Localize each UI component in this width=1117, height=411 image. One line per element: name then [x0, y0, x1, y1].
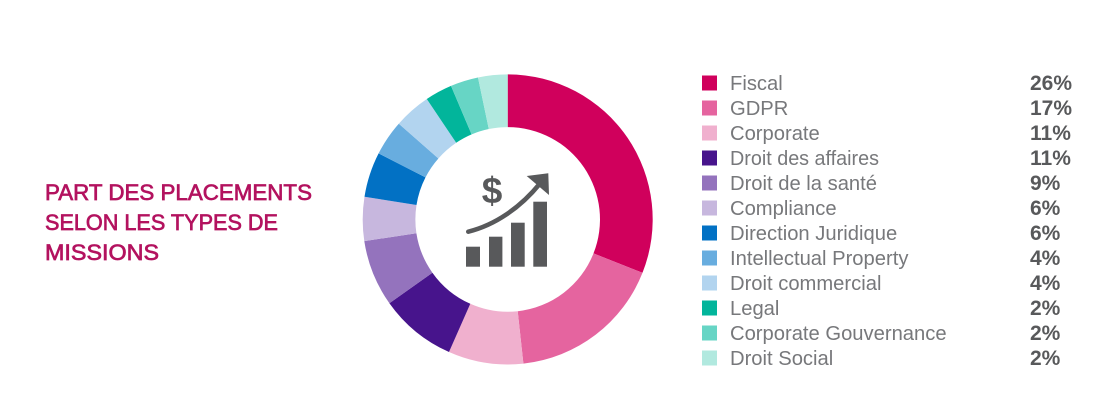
segment: Intellectual Property 4% — [379, 124, 438, 177]
legend labels: Droit Social — [730, 348, 833, 370]
segment: Droit des affaires 11% — [389, 273, 470, 352]
legend percentages: 2% — [1030, 322, 1061, 345]
segment: Corporate 11% — [449, 304, 523, 364]
legend percentages: 6% — [1030, 197, 1061, 220]
legend percentages: 2% — [1030, 297, 1061, 320]
legend percentages: 17% — [1030, 97, 1072, 120]
segment: Compliance 6% — [363, 197, 416, 241]
icon: dollar sign: $ — [482, 170, 503, 211]
icon: dollar growth chart — [466, 170, 549, 267]
title — [45, 180, 312, 265]
legend percentages: 2% — [1030, 347, 1061, 370]
legend percentages: 9% — [1030, 172, 1061, 195]
legend percentages: 11% — [1030, 122, 1071, 145]
segment: Droit commercial 4% — [399, 99, 456, 158]
legend labels: Corporate Gouvernance — [730, 323, 947, 345]
legend percentages: 6% — [1030, 222, 1061, 245]
segment: Droit de la santé 9% — [364, 233, 432, 303]
legend percentages: 4% — [1030, 272, 1061, 295]
legend percentages: 11% — [1030, 147, 1071, 170]
segment: Droit Social 2% — [478, 74, 508, 129]
donut chart — [363, 74, 653, 364]
legend labels — [730, 73, 947, 370]
legend labels: Intellectual Property — [730, 248, 909, 270]
legend labels: Droit des affaires — [730, 148, 879, 170]
legend percentages: 26% — [1030, 72, 1072, 95]
title: PART DES PLACEMENTS — [45, 180, 312, 205]
legend labels: GDPR — [730, 98, 788, 120]
segment: Direction Juridique 6% — [364, 153, 426, 205]
legend labels: Fiscal — [730, 73, 783, 95]
segment: GDPR 17% — [518, 253, 642, 364]
segment: Fiscal 26% — [508, 74, 653, 273]
legend percentages — [1030, 72, 1072, 370]
legend labels: Corporate — [730, 123, 820, 145]
legend labels: Compliance — [730, 198, 837, 220]
legend swatches — [702, 76, 717, 366]
segment: Corporate Gouvernance 2% — [451, 78, 489, 134]
legend labels: Direction Juridique — [730, 223, 897, 245]
title: MISSIONS — [45, 240, 159, 265]
icon: bars — [466, 202, 547, 267]
segment: Legal 2% — [427, 86, 472, 143]
icon: rising arrow — [468, 173, 549, 232]
legend labels: Droit de la santé — [730, 173, 877, 195]
legend labels: Droit commercial — [730, 273, 881, 295]
legend percentages: 4% — [1030, 247, 1061, 270]
legend — [702, 72, 1072, 370]
title: SELON LES TYPES DE — [45, 210, 278, 235]
legend labels: Legal — [730, 298, 779, 320]
